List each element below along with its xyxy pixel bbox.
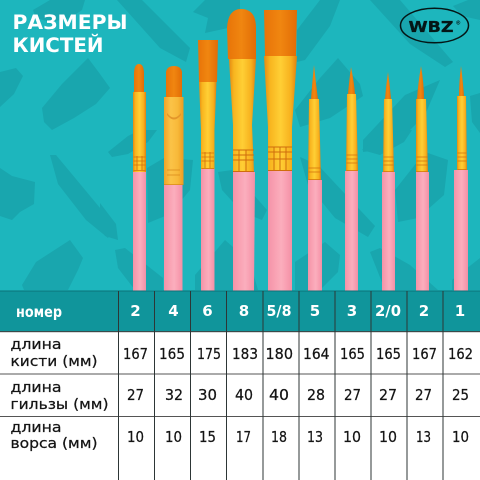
row: brush length: 167 [123,345,148,363]
title: КИСТЕЙ [12,34,103,57]
row: brush length: 175 [197,345,221,363]
brush 4: number 8 filbert [227,9,256,292]
brush 10: number 1 round [454,66,468,292]
brush 1: number 2 flat-round [133,64,146,292]
row: brush length: 162 [448,345,473,363]
header labels: 2/0 [375,302,401,320]
row: bristle length: длина [10,420,62,436]
row: bristle length: 13 [307,428,323,446]
row: brush length [10,337,473,370]
header labels: номер [16,303,62,321]
brush-stroke background pattern [0,0,480,290]
header labels: 8 [239,302,249,320]
row: bristle length: 10 [127,428,144,446]
row: ferrule length: 27 [379,386,397,404]
header labels: 1 [455,302,465,320]
row: ferrule length: 40 [235,386,253,404]
row: ferrule length: 30 [198,386,217,404]
table [0,290,480,480]
row: ferrule length: 27 [344,386,361,404]
logo: WBZ [400,8,468,43]
row: brush length: 167 [412,345,437,363]
row: bristle length: 13 [416,428,431,446]
brush 9: number 2 round [416,66,429,292]
row: bristle length: 17 [236,428,251,446]
header labels: 2 [130,302,141,320]
row: bristle length: 10 [343,428,361,446]
row: bristle length [10,420,469,452]
row: brush length: 165 [159,345,185,363]
title: РАЗМЕРЫ [12,11,128,34]
row: bristle length: 10 [452,428,469,446]
row: ferrule length: 27 [127,386,144,404]
row: brush length: 183 [232,345,258,363]
brush 5: number 5/8 wide flat [264,10,297,292]
row: bristle length: 18 [271,428,287,446]
row: brush length: кисти (мм) [10,354,98,370]
logo: WBZ: WBZ [408,18,454,36]
row: bristle length: 10 [165,428,182,446]
row: ferrule length: 32 [165,386,183,404]
title [12,11,128,57]
row: brush length: длина [10,337,62,353]
row: bristle length: 15 [199,428,216,446]
logo: WBZ: ® [456,20,461,26]
row: brush length: 164 [303,345,330,363]
row: ferrule length: 40 [269,386,289,404]
brush 2: number 4 flat [164,66,184,292]
header labels: 3 [347,302,357,320]
header labels: 5 [310,302,320,320]
row: bristle length: 10 [379,428,397,446]
row: ferrule length [10,380,469,413]
row: brush length: 165 [376,345,401,363]
row: ferrule length: 27 [415,386,432,404]
row: ferrule length: длина [10,380,62,396]
row: brush length: 180 [266,345,293,363]
header labels: 6 [202,302,213,320]
brush 6: number 5 round [308,65,322,292]
row: ferrule length: гильзы (мм) [10,397,108,413]
teal background [0,0,480,292]
header labels: 2 [419,302,429,320]
brush 3: number 6 flat [198,40,218,292]
row: brush length: 165 [340,345,365,363]
row: ferrule length: 28 [307,386,325,404]
brush 8: number 2/0 round [382,72,395,292]
row: bristle length: ворса (мм) [10,436,98,452]
header labels: 4 [168,302,179,320]
table header band [0,291,480,332]
header labels: 5/8 [266,302,292,320]
brush 7: number 3 round [345,67,358,292]
row: ferrule length: 25 [452,386,469,404]
header labels [16,302,465,321]
